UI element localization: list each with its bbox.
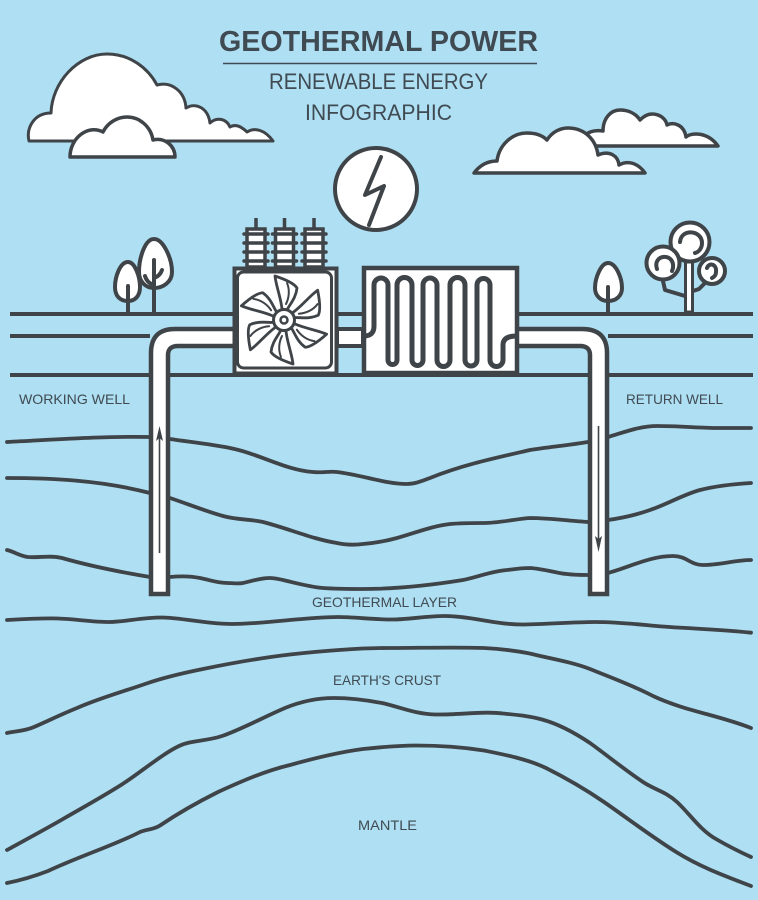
label: working well: WORKING WELL — [19, 391, 130, 407]
icon: lightning bolt circle — [335, 148, 417, 230]
pipe: working well — [151, 329, 233, 594]
clouds: left — [28, 54, 273, 157]
icon: right small tree — [595, 263, 622, 312]
insulators — [244, 218, 326, 267]
label: earth's crust: EARTH'S CRUST — [333, 672, 441, 688]
icon: right round tree — [646, 222, 725, 312]
ground lines — [10, 314, 753, 375]
strata lines — [7, 426, 751, 886]
pipe: return well — [518, 329, 607, 594]
arrow: up in working well — [156, 426, 163, 553]
icon: fan — [239, 276, 329, 364]
clouds: right — [474, 110, 718, 173]
subtitle — [269, 69, 488, 125]
icon: left trees — [115, 239, 172, 312]
subtitle: RENEWABLE ENERGY — [269, 69, 488, 94]
arrow: down in return well — [595, 426, 602, 552]
label: return well: RETURN WELL — [626, 391, 723, 407]
panel: heat exchanger coil — [364, 268, 517, 373]
label: mantle: MANTLE — [358, 817, 417, 833]
title: GEOTHERMAL POWER — [219, 26, 538, 58]
subtitle: INFOGRAPHIC — [305, 100, 452, 125]
panel: turbine fan unit — [234, 268, 336, 374]
pipe: connector between units — [337, 329, 363, 346]
label: geothermal layer: GEOTHERMAL LAYER — [312, 594, 457, 610]
